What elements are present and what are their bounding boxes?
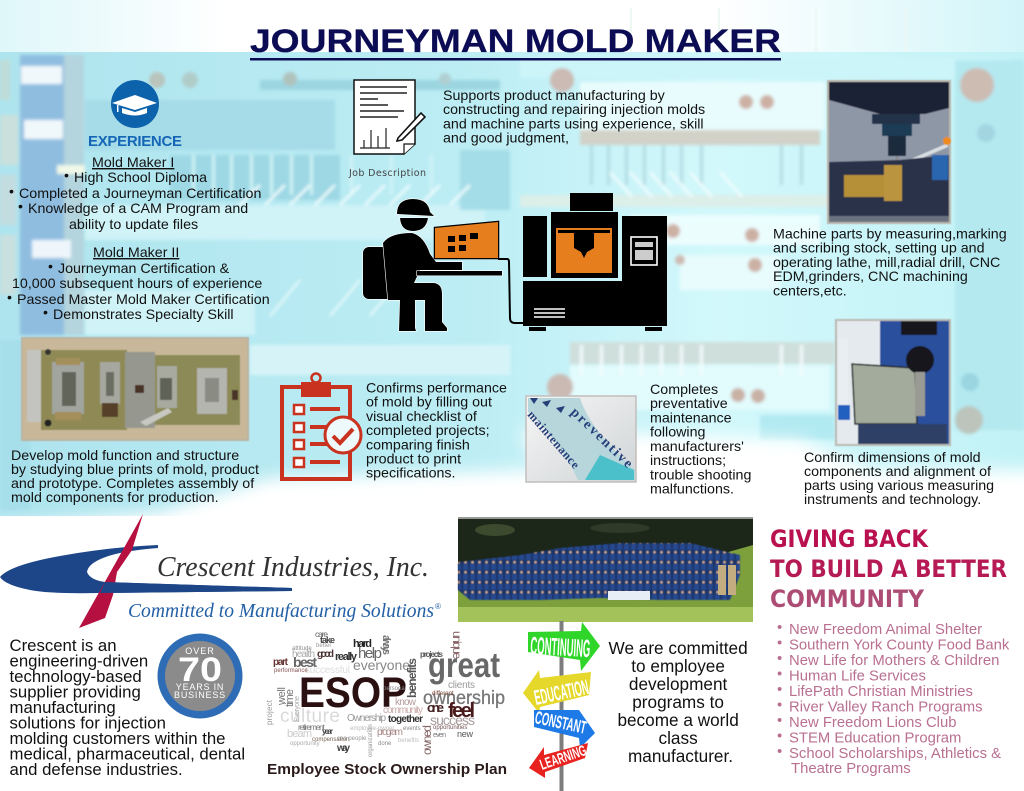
text block: machine parts: Machine parts by measuring,marking bbox=[773, 226, 1007, 242]
text block: mold maker I: • bbox=[9, 184, 14, 200]
text block: preventative maintenance: Completes bbox=[650, 382, 718, 398]
text block: confirm dimensions: components and alignment of bbox=[804, 464, 991, 480]
word cloud: ESOP bbox=[265, 629, 505, 757]
word cloud: ESOP: events bbox=[403, 726, 421, 732]
text block: mold maker I: Completed a Journeyman Certification bbox=[19, 186, 261, 202]
badge: over 70 years in business: YEARS IN bbox=[176, 682, 224, 692]
text block: preventative maintenance: malfunctions. bbox=[650, 482, 734, 498]
word cloud: ESOP: successful bbox=[305, 665, 350, 676]
list: community organizations: New Life for Mothers & Children bbox=[789, 653, 999, 669]
text block: employee development: manufacturer. bbox=[628, 746, 733, 766]
photo: mold halves bbox=[21, 337, 249, 441]
word cloud: ESOP: clients bbox=[448, 680, 475, 691]
word cloud: ESOP: owned bbox=[420, 725, 434, 755]
word cloud: ESOP: time bbox=[284, 689, 296, 707]
signpost arrows: EDUCATION bbox=[532, 676, 591, 710]
text block: confirms performance: Confirms performance bbox=[366, 380, 507, 396]
word cloud: ESOP: really bbox=[335, 651, 358, 663]
photo: preventive maintenance gears: maintenance bbox=[525, 408, 583, 472]
word cloud: ESOP: best bbox=[293, 654, 317, 670]
list: community organizations: • bbox=[777, 620, 782, 636]
text block: supports product manufacturing: constructing and repairing injection molds bbox=[443, 102, 705, 118]
logo: Crescent Industries bbox=[0, 514, 441, 628]
logo: Crescent Industries: ® bbox=[435, 602, 441, 611]
caption: employee stock ownership plan: Employee Stock Ownership Plan bbox=[267, 761, 507, 778]
text block: employee development: programs to bbox=[632, 692, 724, 712]
text block: employee development: class bbox=[659, 728, 698, 748]
heading: giving back: COMMUNITY bbox=[770, 585, 925, 613]
text block: preventative maintenance: instructions; bbox=[650, 453, 726, 469]
text block: mold maker I: High School Diploma bbox=[74, 170, 207, 186]
text block: confirm dimensions: instruments and technology. bbox=[804, 492, 981, 508]
text block: confirm dimensions: parts using various measuring bbox=[804, 478, 994, 494]
text block: mold maker I: • bbox=[18, 199, 23, 215]
text block: crescent description: engineering-driven bbox=[10, 652, 148, 670]
word cloud: ESOP: know bbox=[395, 697, 417, 708]
signpost arrows: CONSTANT bbox=[533, 707, 588, 738]
word cloud: ESOP: ceo people bbox=[337, 736, 367, 742]
text block: crescent description: medical, pharmaceutical, dental bbox=[10, 744, 245, 764]
word cloud: ESOP: well bbox=[276, 687, 288, 706]
text block: machine parts: and scribing stock, setting up and bbox=[773, 241, 985, 257]
heading: giving back bbox=[770, 525, 1007, 613]
word cloud: ESOP: retirement bbox=[298, 722, 326, 732]
word cloud: ESOP: community bbox=[383, 705, 423, 716]
text block: employee development: to employee bbox=[631, 656, 725, 676]
word cloud: ESOP: Everyone bbox=[294, 696, 301, 722]
text block: mold maker I: ability to update files bbox=[69, 217, 198, 233]
list: community organizations: • bbox=[777, 636, 782, 652]
caption: job description: Job Description bbox=[348, 168, 426, 179]
text block: crescent description: Crescent is an bbox=[10, 636, 117, 655]
text block: preventative maintenance: maintenance bbox=[650, 410, 732, 426]
word cloud: ESOP: benefits bbox=[398, 738, 419, 744]
photo: preventive maintenance gears bbox=[525, 396, 636, 482]
text block: mold maker I: • bbox=[64, 168, 69, 184]
text block: confirms performance: specifications. bbox=[366, 466, 456, 482]
word cloud: ESOP: new bbox=[457, 729, 474, 739]
text block: develop mold function: mold components for production. bbox=[11, 490, 219, 506]
text block: preventative maintenance: trouble shooting bbox=[650, 468, 751, 484]
text block: mold maker I: Knowledge of a CAM Program and bbox=[28, 201, 248, 217]
word cloud: ESOP: better bbox=[316, 643, 331, 649]
photo: mill cutting gold part bbox=[827, 80, 951, 224]
word cloud: ESOP: care bbox=[315, 629, 328, 639]
text block: crescent description: technology-based bbox=[10, 667, 142, 686]
text block: confirms performance: of mold by filling out bbox=[366, 395, 492, 411]
word cloud: ESOP: benefits bbox=[405, 658, 419, 698]
text block: crescent description: and defense industries. bbox=[10, 760, 183, 779]
list: community organizations: New Freedom Animal Shelter bbox=[789, 622, 982, 638]
list: community organizations: • bbox=[777, 744, 782, 760]
word cloud: ESOP: attitude bbox=[292, 646, 312, 652]
word cloud: ESOP: take bbox=[320, 635, 335, 645]
text block: preventative maintenance: following bbox=[650, 425, 705, 441]
text block: supports product manufacturing: Supports product manufacturing by bbox=[443, 88, 666, 104]
text block: mold maker II: 10,000 subsequent hours of experience bbox=[12, 276, 262, 292]
word cloud: ESOP: ownership bbox=[423, 688, 505, 709]
word cloud: ESOP: everyone bbox=[353, 657, 410, 673]
text block: machine parts: centers,etc. bbox=[773, 284, 847, 300]
text block: employee development: We are committed bbox=[609, 638, 748, 658]
text block: employee development: development bbox=[629, 674, 728, 694]
badge: over 70 years in business: 70 bbox=[178, 651, 222, 689]
word cloud: ESOP: opportunities bbox=[433, 725, 467, 731]
icon: job description document bbox=[354, 80, 425, 154]
list: community organizations: STEM Education Program bbox=[789, 730, 961, 746]
word cloud: ESOP: always bbox=[380, 635, 392, 655]
word cloud: ESOP: help bbox=[358, 645, 382, 662]
text block: crescent description: solutions for injection bbox=[10, 714, 166, 732]
word cloud: ESOP: year bbox=[322, 727, 333, 736]
word cloud: ESOP: project bbox=[265, 699, 274, 725]
text block: mold maker II: Mold Maker II bbox=[93, 245, 179, 261]
list: community organizations: • bbox=[777, 651, 782, 667]
word cloud: ESOP: different bbox=[432, 691, 454, 697]
list: community organizations: Human Life Services bbox=[789, 668, 926, 684]
word cloud: ESOP: feel bbox=[448, 700, 475, 722]
list: community organizations: • bbox=[777, 666, 782, 682]
badge: over 70 years in business: OVER bbox=[185, 646, 215, 656]
word cloud: ESOP: even bbox=[433, 732, 446, 739]
word cloud: ESOP: together bbox=[388, 714, 423, 725]
word cloud: ESOP: Ownership bbox=[347, 713, 386, 724]
text block: employee development: become a world bbox=[617, 710, 739, 730]
word cloud: ESOP: projects bbox=[420, 650, 444, 659]
text block: preventative maintenance: manufacturers' bbox=[650, 439, 744, 455]
text block: mold maker II: Journeyman Certification & bbox=[58, 261, 230, 277]
list: community organizations: • bbox=[777, 698, 782, 714]
logo: Crescent Industries: Committed to Manufacturing Solutions bbox=[128, 600, 434, 622]
photo: coordinate measuring machine bbox=[835, 319, 951, 446]
list: community organizations: Southern York County Food Bank bbox=[789, 638, 1010, 654]
text: CONTINUING bbox=[530, 632, 591, 663]
text block: machine parts: operating lathe, mill,radial drill, CNC bbox=[773, 255, 1000, 271]
word cloud: ESOP: opportunity bbox=[290, 741, 320, 747]
text block: preventative maintenance: preventative bbox=[650, 396, 728, 412]
word cloud: ESOP: compensation bbox=[312, 737, 349, 743]
text block: confirms performance: visual checklist of bbox=[366, 409, 477, 425]
text block: develop mold function: and prototype. Completes assembly of bbox=[11, 476, 254, 492]
word cloud: ESOP: hard bbox=[353, 638, 372, 650]
list: community organizations: • bbox=[777, 713, 782, 729]
list: community organizations: Theatre Programs bbox=[791, 761, 911, 777]
icon: graduation cap bbox=[111, 80, 159, 128]
icon: red checklist clipboard bbox=[282, 374, 361, 479]
list: community organizations: • bbox=[777, 682, 782, 698]
text block: mold maker II: Passed Master Mold Maker Certification bbox=[17, 292, 270, 308]
badge: over 70 years in business: BUSINESS bbox=[174, 690, 226, 700]
list: community organizations: River Valley Ranch Programs bbox=[789, 700, 983, 716]
word cloud: ESOP: health bbox=[292, 649, 315, 660]
title: JOURNEYMAN MOLD MAKER bbox=[250, 23, 781, 59]
text block: crescent description: supplier providing bbox=[10, 682, 141, 702]
heading: giving back: GIVING BACK bbox=[770, 525, 929, 553]
word cloud: ESOP: organization bbox=[368, 724, 374, 757]
text block: mold maker I: Mold Maker I bbox=[92, 155, 174, 171]
text block: crescent description: molding customers within the bbox=[10, 729, 225, 748]
word cloud: ESOP: beam bbox=[287, 728, 312, 740]
text block: mold maker II: • bbox=[7, 290, 12, 306]
word cloud: ESOP: culture bbox=[280, 706, 340, 727]
icon: CNC machine bbox=[523, 193, 667, 331]
badge: over 70 years in business bbox=[158, 634, 242, 718]
text block: mold maker II: Demonstrates Specialty Skill bbox=[53, 307, 234, 323]
word cloud: ESOP: unique bbox=[450, 631, 464, 659]
word cloud: ESOP: done bbox=[378, 741, 392, 747]
text block: mold maker II: • bbox=[48, 259, 53, 275]
word cloud: ESOP: personal bbox=[383, 686, 406, 692]
text block: supports product manufacturing: and machine parts using experience, skill bbox=[443, 116, 704, 132]
text block: develop mold function: by studying blue prints of mold, product bbox=[11, 462, 259, 478]
word cloud: ESOP: great bbox=[428, 646, 500, 685]
text block: confirms performance: comparing finish bbox=[366, 437, 470, 453]
word cloud: ESOP: one bbox=[427, 700, 444, 715]
word cloud: ESOP: way bbox=[336, 743, 350, 754]
text block: mold maker II: • bbox=[43, 305, 48, 321]
logo: Crescent Industries: Crescent Industries, Inc. bbox=[157, 551, 429, 583]
photo: preventive maintenance gears: preventive bbox=[567, 405, 635, 471]
text block: confirms performance: product to print bbox=[366, 452, 461, 468]
icon: machinist at computer bbox=[363, 199, 524, 331]
list: community organizations: School Scholarships, Athletics & bbox=[789, 746, 1001, 762]
heading: experience: EXPERIENCE bbox=[88, 133, 182, 150]
signpost arrows: LEARNING bbox=[538, 742, 589, 774]
photo: company group picture bbox=[458, 517, 753, 622]
list: community organizations: • bbox=[777, 728, 782, 744]
text block: develop mold function: Develop mold function and structure bbox=[11, 448, 239, 464]
text block: supports product manufacturing: and good judgment, bbox=[443, 131, 569, 147]
list: community organizations: LifePath Christian Ministries bbox=[789, 684, 973, 700]
word cloud: ESOP: success bbox=[430, 712, 475, 728]
text block: confirm dimensions: Confirm dimensions of mold bbox=[804, 450, 981, 466]
text block: crescent description: manufacturing bbox=[10, 698, 116, 717]
text block: machine parts: EDM,grinders, CNC machining bbox=[773, 269, 968, 285]
text block: confirms performance: completed projects; bbox=[366, 423, 490, 439]
word cloud: ESOP: program bbox=[377, 727, 403, 738]
word cloud: ESOP: good bbox=[317, 649, 334, 660]
signpost arrows bbox=[523, 621, 600, 791]
word cloud: ESOP: ESOP bbox=[299, 669, 407, 717]
word cloud: ESOP: part bbox=[273, 657, 289, 668]
list: community organizations: New Freedom Lions Club bbox=[789, 715, 956, 731]
word cloud: ESOP: employee-owner bbox=[350, 726, 394, 732]
word cloud: ESOP: performance bbox=[274, 668, 308, 674]
